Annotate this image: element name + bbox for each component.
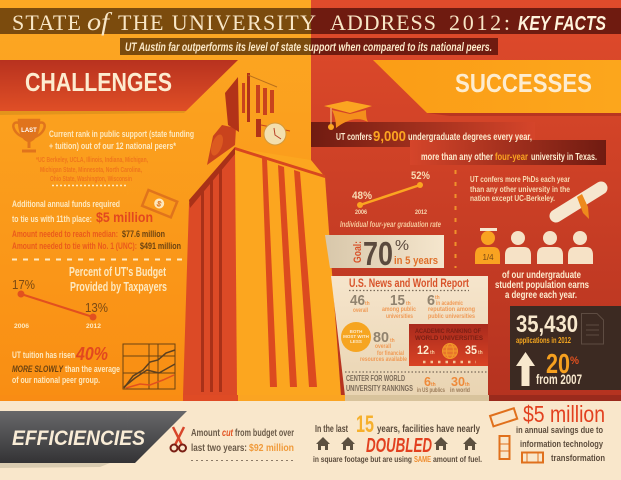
panel: applications: % [570,355,579,367]
panel: U.S. News rankings: U.S. News and World Report [349,276,469,290]
rank 46th overall: th [365,301,370,307]
callout: 9,000 degrees: UT confers [336,132,372,143]
badge: both most with less [341,322,371,352]
efficiencies banner: EFFICIENCIES [12,427,145,450]
text: PhDs: than any other university in the [470,184,570,194]
panel: challenges banner [0,60,238,115]
text: facilities doubled: years, facilities have nearly [377,423,480,435]
text: facilities doubled: DOUBLED [366,435,432,457]
rank 15th among public universities [382,292,416,320]
text: budget cut: Amount [191,428,221,439]
panel: applications: from 2007 [536,371,582,387]
text: tuition risen: of our national peer group. [12,375,100,386]
text: population earns a degree: student population earns [495,280,589,291]
rank 6th academic reputation: reputation among [428,306,475,313]
rank 80th financial resources: for financial [377,350,404,357]
panel: academic ranking of world universities: WORLD UNIVERSITIES [415,335,484,342]
icon: clock [264,123,286,145]
rank 46th overall [350,292,370,314]
center for world university rankings: in world [450,387,470,394]
rank 15th among public universities: th [406,301,411,307]
text: PhDs [470,174,571,203]
chart: graduation rate [340,170,441,229]
text: peers footnote: Ohio State, Washington, Wisconsin [50,174,132,183]
icons: money bills [490,408,543,462]
rank 80th financial resources: resources available [360,356,407,363]
text: current rank [49,129,194,151]
text: budget cut [191,428,294,454]
background: successes side [311,0,621,396]
panel: applications [510,306,621,390]
text: facilities doubled: amount of fuel. [433,454,482,464]
chart: percent of budget provided by taxpayers: 17% [12,277,35,292]
rank 6th academic reputation: public universities [428,313,475,320]
title band: THE UNIVERSITY [118,10,316,35]
rank 80th financial resources [360,329,407,363]
icon: diploma scroll [556,188,601,219]
center for world university rankings: in US publics [417,387,445,394]
title band: of [87,9,112,36]
callout: 9,000 degrees: four-year [495,152,528,163]
text: funds required: $491 million [140,241,181,251]
panel: academic ranking of world universities [409,324,488,366]
text: PhDs: UT confers more PhDs each year [470,174,571,184]
icon: dollar bill [142,190,177,217]
panel: academic ranking of world universities: th [430,350,435,356]
text: tuition risen: than the average [65,364,120,375]
icon: globe [442,344,458,358]
center for world university rankings: 6 [424,374,431,389]
tower illustration [183,73,341,396]
title band: ADDRESS [330,10,436,35]
text: funds required: Amount needed to tie with No. 1 (UNC): [12,241,137,251]
text: current rank: + tuition) out of our 12 national peers* [49,141,176,151]
callout: 9,000 degrees: university in Texas. [531,152,597,163]
panel: academic ranking of world universities: ACADEMIC RANKING OF [415,328,481,335]
rank 15th among public universities: universities [386,313,413,320]
panel: applications: 20 [546,348,570,379]
text: PhDs: nation except UC-Berkeley. [470,193,555,203]
icon: trophy: LAST [21,128,37,134]
text: population earns a degree [495,270,589,301]
text: peers footnote: *UC Berkeley, UCLA, Illinois, Indiana, Michigan, [36,155,148,164]
text: budget cut: cut [222,428,233,439]
rank 15th among public universities: 15 [390,292,405,309]
rank 6th academic reputation: th [435,295,440,301]
chart: graduation rate: 2006 [355,210,368,216]
text: $5 million savings: $5 million [523,401,605,427]
rank 6th academic reputation: 6 [427,292,435,309]
center for world university rankings: UNIVERSITY RANKINGS [346,384,413,393]
rank 6th academic reputation [427,292,475,320]
text: facilities doubled: 15 [356,411,374,438]
icon: trophy [13,120,45,151]
text: funds required: $5 million [96,209,153,225]
center for world university rankings: th [465,382,470,388]
text: facilities doubled: In the last [315,423,348,435]
text: funds required: Amount needed to reach median: [12,229,118,239]
text: population earns a degree: a degree each year. [505,290,577,301]
text: funds required: to tie us with 11th place: [12,214,92,225]
text: tuition risen [12,344,120,386]
badge: both most with less: BOTH [350,329,362,334]
chart: percent of budget provided by taxpayers: 13% [85,300,108,315]
text: funds required [12,199,181,251]
text: budget cut: last two years: [191,443,247,454]
chart: percent of budget provided by taxpayers: Provided by Taxpayers [70,279,167,294]
panel: goal: in 5 years [394,255,438,267]
title band: STATE [12,10,81,35]
center for world university rankings: CENTER FOR WORLD [346,374,405,383]
panel: goal: % [395,237,409,254]
rank 80th financial resources: 80 [373,329,389,346]
panel: applications: 35,430 [516,311,578,338]
icon: document [582,314,604,344]
chart: tuition line chart [123,344,175,389]
text: population earns a degree: of our undergraduate [502,270,581,281]
rank 80th financial resources: th [390,338,395,344]
panel: academic ranking of world universities: 35 [465,343,477,357]
badge: both most with less: LESS [350,339,362,344]
rank 15th among public universities: among public [382,306,416,313]
text: peers footnote [36,155,148,183]
callout: 9,000 degrees: 9,000 [373,128,406,145]
panel: academic ranking of world universities: 12 [417,343,429,357]
chart: percent of budget provided by taxpayers: 2006 [14,323,29,330]
text: funds required: $77.6 million [122,229,165,239]
rank 80th financial resources: overall [375,343,391,350]
callout: 9,000 degrees: more than any other [421,152,493,163]
icon group: one in four students: 1/4 [482,253,494,262]
text: $5 million savings [516,401,605,464]
badge: both most with less: MOST WITH [343,334,369,339]
panel: U.S. News rankings [331,276,488,396]
icon: graduation cap [324,101,372,130]
panel: academic ranking of world universities: th [478,350,483,356]
subtitle band [120,38,498,55]
icon group: one in four students [475,228,593,264]
title band: 2012: [449,10,510,35]
chart: percent of budget provided by taxpayers: Percent of UT's Budget [69,264,166,279]
icon: dollar bill: $ [155,199,163,209]
chart: percent of budget provided by taxpayers [12,264,167,330]
panel: goal: Goal: [352,241,364,263]
panel: efficiencies footer [0,401,621,480]
chart: graduation rate: Individual four-year graduation rate [340,220,441,229]
panel: successes banner [373,60,621,116]
panel: goal [325,235,444,272]
text: funds required: Additional annual funds required [12,199,120,210]
callout: 9,000 degrees: undergraduate degrees every year, [408,132,532,143]
subtitle band: UT Austin far outperforms its level of state support when compared to its national peers. [125,40,492,54]
rank 46th overall: overall [353,307,368,314]
chart: graduation rate: 52% [411,170,430,182]
text: budget cut: $92 million [249,443,294,454]
text: current rank: Current rank in public support (state funding [49,129,194,139]
chart: percent of budget provided by taxpayers: 2012 [86,323,101,330]
center for world university rankings: 30 [451,374,465,389]
text: tuition risen: UT tuition has risen [12,350,75,361]
title band [0,8,621,36]
icon: scissors [170,427,186,452]
text: facilities doubled: in square footage but are using [313,454,412,464]
rank 46th overall: 46 [350,292,365,309]
text: facilities doubled [313,411,482,464]
text: budget cut: from budget over [235,428,294,439]
text: tuition risen: MORE SLOWLY [12,364,64,375]
text: $5 million savings: transformation [551,453,605,464]
colored divider strip [0,395,621,401]
text: peers footnote: Michigan State, Minnesota, North Carolina, [40,165,142,174]
text: tuition risen: 40% [75,344,108,364]
efficiencies banner [0,411,187,468]
icon: up arrow [516,352,535,386]
text: facilities doubled: SAME [414,454,431,464]
chart: graduation rate: 2012 [415,210,428,216]
center for world university rankings: th [431,382,436,388]
rank 6th academic reputation: in academic [436,300,463,307]
center for world university rankings [346,374,470,394]
icons: houses [316,437,477,450]
panel: challenges banner: CHALLENGES [25,67,172,97]
panel: goal: 70 [363,235,393,272]
background: challenges side [0,0,311,396]
callout: 9,000 degrees [311,122,606,165]
panel: applications: applications in 2012 [516,335,571,345]
chart: graduation rate: 48% [352,190,372,202]
panel: successes banner: SUCCESSES [455,68,592,98]
